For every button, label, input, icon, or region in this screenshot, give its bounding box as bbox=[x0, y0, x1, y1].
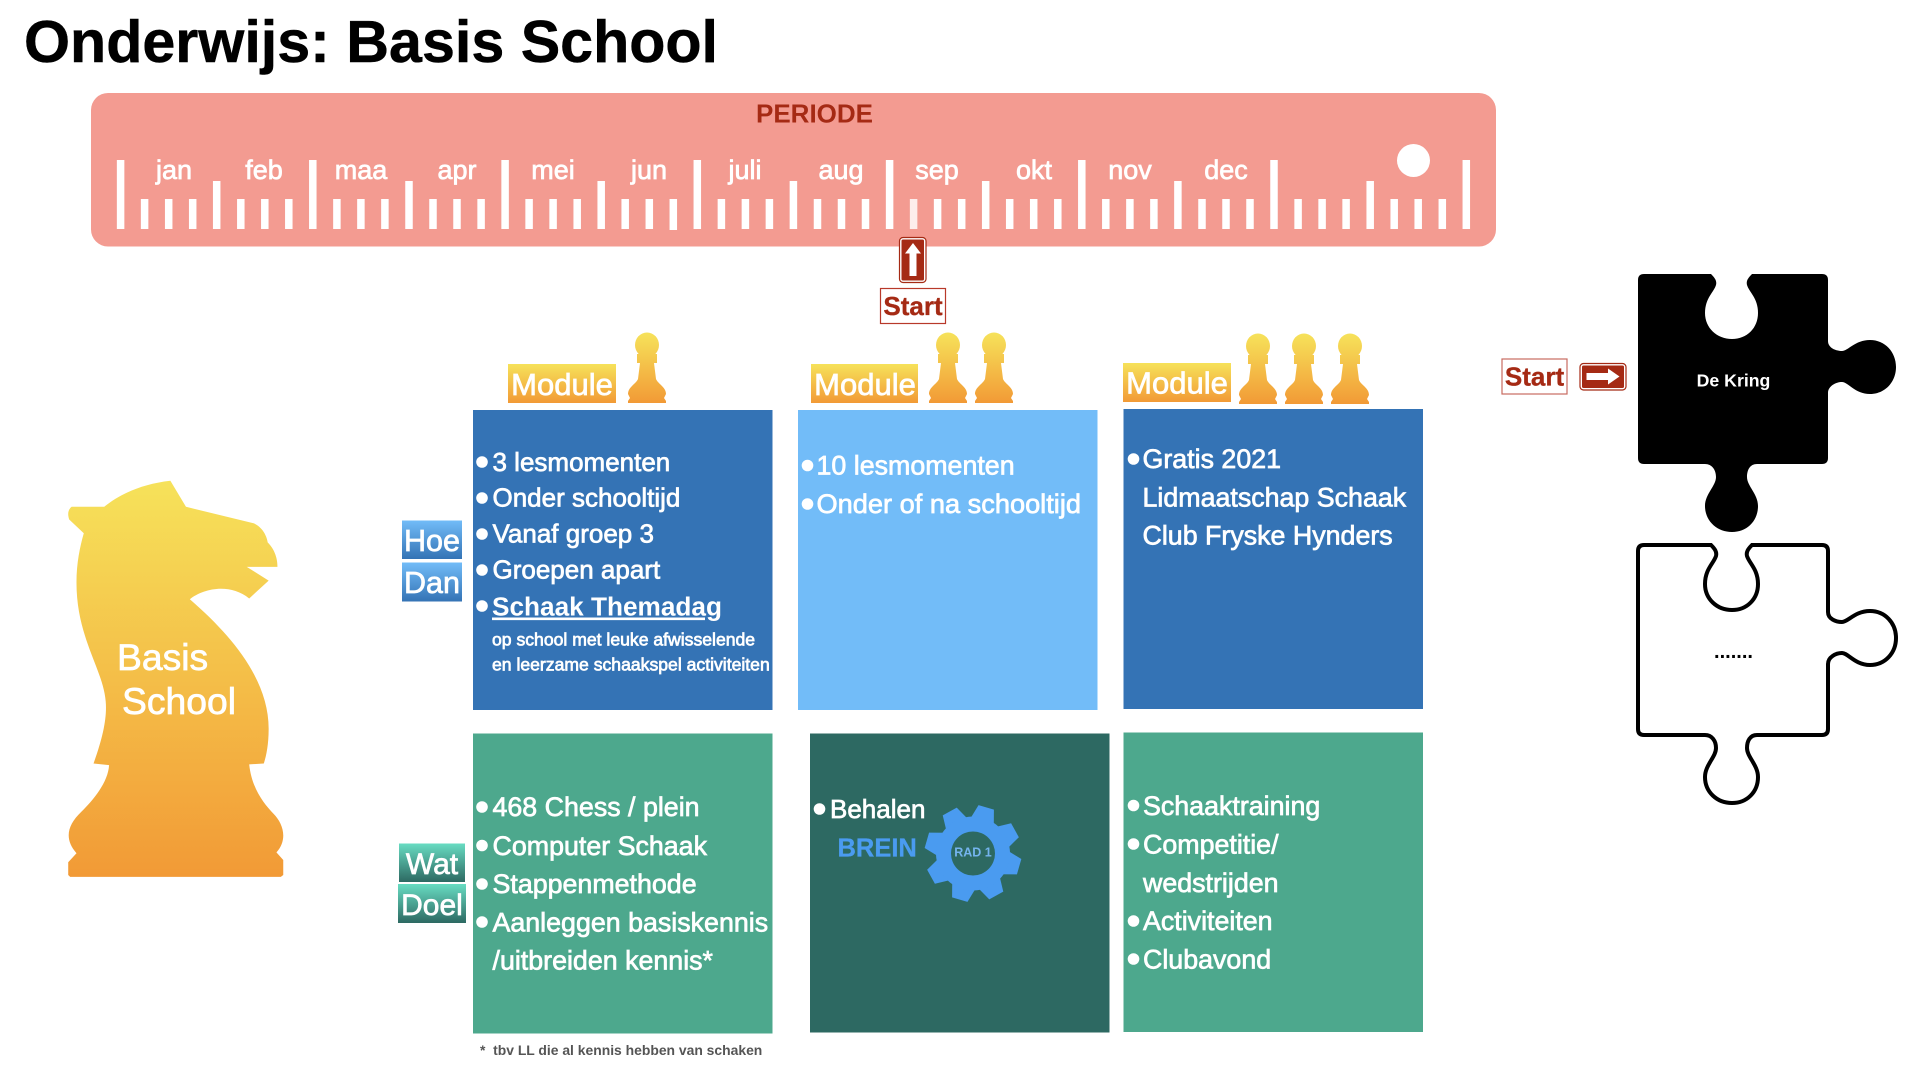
panel: module 1 hoe dan: op school met leuke afwisselende bbox=[492, 630, 755, 650]
title: Onderwijs: Basis School bbox=[24, 9, 718, 75]
module 2 header: Module bbox=[814, 367, 916, 402]
month labels: okt bbox=[1016, 155, 1053, 185]
panel: module 1 hoe dan: en leerzame schaakspel activiteiten bbox=[492, 654, 770, 674]
month labels: juli bbox=[727, 155, 762, 185]
knight label bbox=[117, 636, 236, 722]
icon: gear: RAD 1 bbox=[954, 846, 992, 860]
label: doel: Doel bbox=[401, 889, 463, 922]
label: start september: Start bbox=[883, 291, 943, 321]
puzzle piece: outline bbox=[1638, 545, 1896, 803]
icon: right arrow start marker bbox=[1580, 364, 1626, 390]
month labels: aug bbox=[818, 155, 864, 185]
panel: module 1 hoe dan: Groepen apart bbox=[492, 554, 661, 584]
ruler heading: PERIODE bbox=[756, 98, 873, 128]
label: hoe: Hoe bbox=[404, 524, 460, 558]
panel: module 3 hoe dan: Club Fryske Hynders bbox=[1142, 520, 1393, 550]
panel: periode ruler bbox=[91, 93, 1496, 246]
label: wat bbox=[399, 844, 465, 882]
panel: module 3 wat doel: Competitie/ bbox=[1143, 830, 1279, 860]
label: dan: Dan bbox=[404, 566, 460, 600]
panel: module 2 wat doel: Behalen bbox=[830, 794, 925, 824]
panel: module 3 wat doel: Activiteiten bbox=[1143, 906, 1273, 936]
panel: module 1 hoe dan: Onder schooltijd bbox=[492, 482, 680, 512]
panel: module 1 hoe dan: 3 lesmomenten bbox=[492, 447, 670, 477]
module 3 header bbox=[1123, 334, 1369, 404]
puzzle piece: de kring: De Kring bbox=[1697, 370, 1770, 390]
month labels: jan bbox=[155, 155, 192, 185]
panel: module 1 hoe dan: Schaak Themadag bbox=[492, 592, 722, 622]
ruler hole bbox=[1397, 144, 1430, 177]
month labels: mei bbox=[531, 155, 575, 185]
panel: module 2 hoe dan: Onder of na schooltijd bbox=[816, 488, 1081, 519]
month labels: jun bbox=[630, 155, 667, 185]
panel: module 1 wat doel: Stappenmethode bbox=[492, 869, 697, 899]
panel: module 1 wat doel: Aanleggen basiskennis bbox=[492, 908, 768, 938]
puzzle piece: de kring bbox=[1638, 274, 1896, 532]
panel: module 1 hoe dan: Vanaf groep 3 bbox=[492, 518, 654, 548]
module 3 header: Module bbox=[1126, 366, 1228, 400]
panel: module 3 hoe dan bbox=[1124, 409, 1423, 709]
module 2 header bbox=[811, 332, 1013, 403]
label: start de kring: Start bbox=[1505, 362, 1564, 392]
module 1 header bbox=[508, 332, 666, 403]
icon: knight chess piece bbox=[68, 481, 283, 877]
puzzle piece: outline: ....... bbox=[1714, 641, 1753, 663]
knight label: Basis bbox=[117, 636, 208, 678]
panel: module 3 wat doel: wedstrijden bbox=[1142, 868, 1279, 898]
label: wat: Wat bbox=[406, 848, 459, 881]
panel: module 3 hoe dan: Lidmaatschap Schaak bbox=[1142, 482, 1407, 512]
month labels: dec bbox=[1204, 155, 1248, 185]
month labels: feb bbox=[245, 155, 283, 185]
month labels: nov bbox=[1108, 155, 1152, 185]
icon: up arrow start marker bbox=[900, 238, 926, 282]
panel: module 1 wat doel: /uitbreiden kennis* bbox=[492, 946, 714, 976]
panel: module 3 wat doel bbox=[1124, 732, 1423, 1032]
panel: module 3 wat doel: Schaaktraining bbox=[1143, 791, 1320, 821]
panel: module 2 wat doel bbox=[810, 734, 1110, 1032]
month labels: sep bbox=[915, 155, 959, 185]
panel: module 2 hoe dan: 10 lesmomenten bbox=[816, 450, 1015, 480]
panel: module 2 wat doel: BREIN bbox=[838, 834, 917, 862]
panel: module 1 wat doel bbox=[473, 734, 772, 1034]
icon: gear bbox=[914, 794, 1032, 913]
panel: module 3 hoe dan: Gratis 2021 bbox=[1142, 444, 1281, 474]
knight label: School bbox=[122, 680, 236, 722]
month labels: apr bbox=[437, 155, 477, 185]
panel: module 1 hoe dan bbox=[473, 410, 772, 710]
panel: module 1 wat doel: 468 Chess / plein bbox=[492, 792, 700, 822]
panel: module 2 hoe dan bbox=[798, 410, 1098, 710]
ruler ticks bbox=[121, 160, 1466, 230]
panel: module 1 wat doel: Computer Schaak bbox=[492, 831, 708, 861]
month labels: maa bbox=[335, 155, 388, 185]
month labels bbox=[155, 155, 1248, 185]
panel: module 3 wat doel: Clubavond bbox=[1143, 944, 1271, 974]
module 1 header: Module bbox=[511, 367, 613, 402]
footnote: * tbv LL die al kennis hebben van schaken bbox=[480, 1042, 762, 1058]
